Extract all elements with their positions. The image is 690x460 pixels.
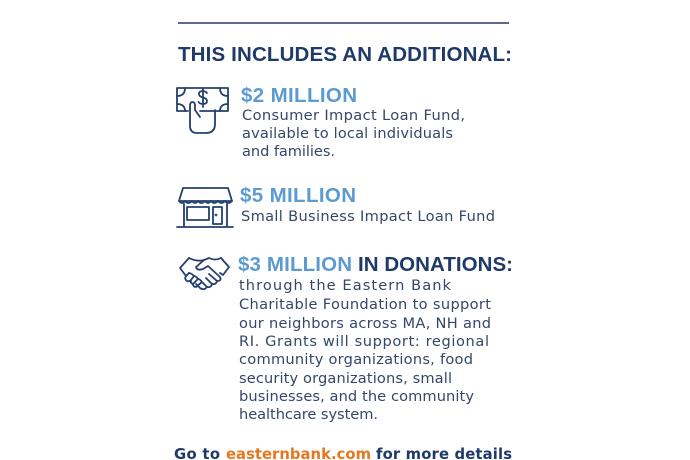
- item: $3 million in donations: security organizations, small: [239, 370, 452, 387]
- item: $2 million: [241, 84, 465, 160]
- item: $3 million in donations: IN DONATIONS:: [358, 253, 513, 276]
- icon: hand holding dollar bill: [177, 88, 228, 133]
- item: $3 million in donations: [238, 253, 513, 423]
- icon: storefront: [177, 188, 233, 227]
- item: $3 million in donations: our neighbors across MA, NH and: [239, 315, 491, 332]
- item: $3 million in donations: through the Eastern Bank: [239, 277, 452, 294]
- item: $2 million: $2 MILLION: [241, 84, 357, 107]
- icon: handshake: [180, 258, 229, 289]
- item: $3 million in donations: RI. Grants will support: regional: [239, 333, 489, 350]
- item: $3 million in donations: $3 MILLION: [238, 253, 352, 276]
- item: $3 million in donations: community organizations, food: [239, 351, 473, 368]
- item: $5 million: [240, 184, 495, 225]
- item: $2 million: and families.: [242, 143, 335, 160]
- item: $3 million in donations: Charitable Foundation to support: [239, 296, 491, 313]
- item: $2 million: Consumer Impact Loan Fund,: [242, 107, 465, 124]
- item: $2 million: available to local individuals: [242, 125, 453, 142]
- footer call to action: [174, 446, 512, 460]
- heading: THIS INCLUDES AN ADDITIONAL:: [178, 43, 512, 66]
- item: $5 million: $5 MILLION: [240, 184, 356, 207]
- item: $3 million in donations: businesses, and the community: [239, 388, 474, 405]
- item: $3 million in donations: healthcare system.: [239, 406, 378, 423]
- item: $5 million: Small Business Impact Loan Fund: [241, 208, 495, 225]
